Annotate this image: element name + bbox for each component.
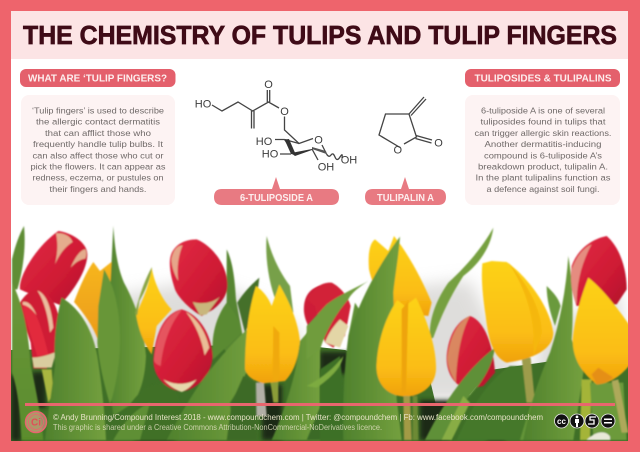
licence icons bbox=[554, 414, 615, 428]
lower right leaves bbox=[580, 379, 592, 440]
text block: tulip fingers description: the allergic contact dermatitis bbox=[36, 117, 160, 127]
big front leaf bbox=[45, 298, 106, 440]
yellow tulip behind bbox=[369, 236, 432, 316]
back leaves and stems bbox=[12, 226, 25, 289]
text block: tulip fingers description: that can afflict those who bbox=[45, 128, 151, 138]
red tulip top centre bbox=[170, 239, 227, 316]
footer logo: Ci bbox=[31, 418, 41, 428]
label: tulipalin A bbox=[365, 177, 446, 205]
chemical structure: 6-tuliposide A: OH bbox=[318, 162, 334, 174]
label: 6-tuliposide A: 6-TULIPOSIDE A bbox=[240, 193, 313, 204]
yellow tulip right bbox=[573, 278, 630, 384]
text block: tulip fingers description: can also affect those who cut or bbox=[32, 150, 164, 160]
title band bbox=[11, 11, 628, 59]
chemical structure: tulipalin A: O bbox=[394, 144, 403, 156]
red tulip at edge bbox=[307, 283, 351, 348]
text block: tulip fingers description: ‘Tulip fingers’ is used to describe bbox=[32, 106, 164, 116]
chemical structure: 6-tuliposide A: OH bbox=[341, 154, 357, 166]
narrow middle leaf bbox=[97, 269, 120, 404]
small yellow tulip bbox=[136, 268, 172, 354]
footer credits: This graphic is shared under a Creative Commons Attribution-NonCommercial-NoDerivatives licence. bbox=[53, 423, 382, 432]
footer credits: © Andy Brunning/Compound Interest 2018 - www.compoundchem.com | Twitter: @compoundchem | Fb: www.facebook.com/compoundchem bbox=[53, 413, 543, 422]
footer credits bbox=[53, 413, 543, 432]
dark gaps between stems bbox=[11, 352, 569, 441]
red tulip centre right bbox=[447, 316, 495, 389]
chemical structure: tulipalin A: O bbox=[434, 138, 443, 150]
chemical structure: 6-tuliposide A: HO bbox=[195, 98, 212, 110]
stem of big yellow tulip bbox=[522, 358, 535, 403]
text block: tuliposide description: In the plant tulipalins function as bbox=[476, 173, 610, 183]
text block: tulip fingers description bbox=[21, 95, 175, 205]
stems bbox=[403, 396, 412, 440]
big yellow tulip bbox=[482, 261, 553, 363]
panel: tuliposides and tulipalins bbox=[465, 69, 620, 205]
red tulip left bbox=[20, 289, 61, 369]
chemical structure: 6-tuliposide A: O bbox=[314, 134, 323, 146]
text block: tulip fingers description: frequently handle tulip bulbs. It bbox=[33, 139, 164, 149]
text block: tuliposide description: can trigger allergic skin reactions. bbox=[474, 128, 612, 138]
back leaves right half bbox=[306, 408, 320, 440]
crossing leaves bbox=[425, 348, 495, 440]
heading: tuliposides and tulipalins: TULIPOSIDES & TULIPALINS bbox=[474, 74, 612, 85]
chemical structure: 6-tuliposide A bbox=[195, 79, 357, 174]
chemical structure: 6-tuliposide A: O bbox=[264, 79, 273, 91]
chemical structure: 6-tuliposide A: HO bbox=[256, 136, 273, 148]
front diagonal leaf bbox=[167, 330, 248, 440]
text block: tuliposide description: breakdown product, tulipalin A. bbox=[478, 162, 608, 172]
heading: what are tulip fingers bbox=[20, 69, 176, 87]
text block: tuliposide description: tuliposides found in tulips that bbox=[480, 117, 606, 127]
text block: tuliposide description: Another dermatitis-inducing bbox=[484, 139, 602, 149]
footer rule bbox=[25, 403, 615, 406]
tall right leaf bbox=[523, 256, 583, 440]
panel: what are tulip fingers bbox=[20, 69, 176, 205]
chemical structure: 6-tuliposide A: HO bbox=[262, 148, 279, 160]
label: tulipalin A: TULIPALIN A bbox=[377, 193, 434, 204]
text block: tulip fingers description: pick the flowers. It can appear as bbox=[30, 162, 166, 172]
red tulip centre bbox=[153, 309, 213, 392]
small leaves bbox=[348, 302, 360, 336]
green mass behind stems bbox=[11, 345, 628, 441]
orange tulip bbox=[74, 261, 115, 341]
label: 6-tuliposide A bbox=[214, 177, 339, 205]
red tulip top right bbox=[571, 236, 627, 306]
soft shadows behind the flowers bbox=[60, 280, 628, 400]
red tulip top left bbox=[20, 231, 87, 305]
central leaves bbox=[211, 302, 228, 360]
lower left leaf bbox=[307, 356, 343, 388]
chemical structure: 6-tuliposide A: O bbox=[280, 106, 289, 118]
title: THE CHEMISTRY OF TULIPS AND TULIP FINGERS bbox=[23, 20, 617, 50]
heading: what are tulip fingers: WHAT ARE ‘TULIP FINGERS? bbox=[28, 74, 167, 85]
photo: tulips bbox=[11, 226, 630, 441]
tall leaf bbox=[107, 226, 146, 416]
lower curved leaf bbox=[130, 384, 178, 440]
yellow tulip front bbox=[376, 298, 436, 397]
yellow tulip left of centre bbox=[245, 284, 300, 383]
main leaf bbox=[343, 237, 402, 440]
heading: tuliposides and tulipalins bbox=[465, 69, 620, 87]
text block: tuliposide description: 6-tuliposide A is one of several bbox=[481, 106, 605, 116]
red tulip bud bbox=[304, 286, 320, 329]
leaf at far left bbox=[12, 283, 43, 440]
licence icons: cc bbox=[557, 417, 566, 426]
text block: tulip fingers description: redness, eczema, or pustules on bbox=[32, 173, 164, 183]
text block: tuliposide description bbox=[465, 95, 620, 205]
text block: tulip fingers description: their fingers and hands. bbox=[50, 184, 146, 194]
text block: tuliposide description: compound is 6-tuliposide A’s bbox=[484, 150, 602, 160]
chemical structure: tulipalin A bbox=[379, 97, 443, 156]
text block: tuliposide description: a defence against soil fungi. bbox=[486, 184, 600, 194]
footer logo bbox=[26, 412, 46, 432]
